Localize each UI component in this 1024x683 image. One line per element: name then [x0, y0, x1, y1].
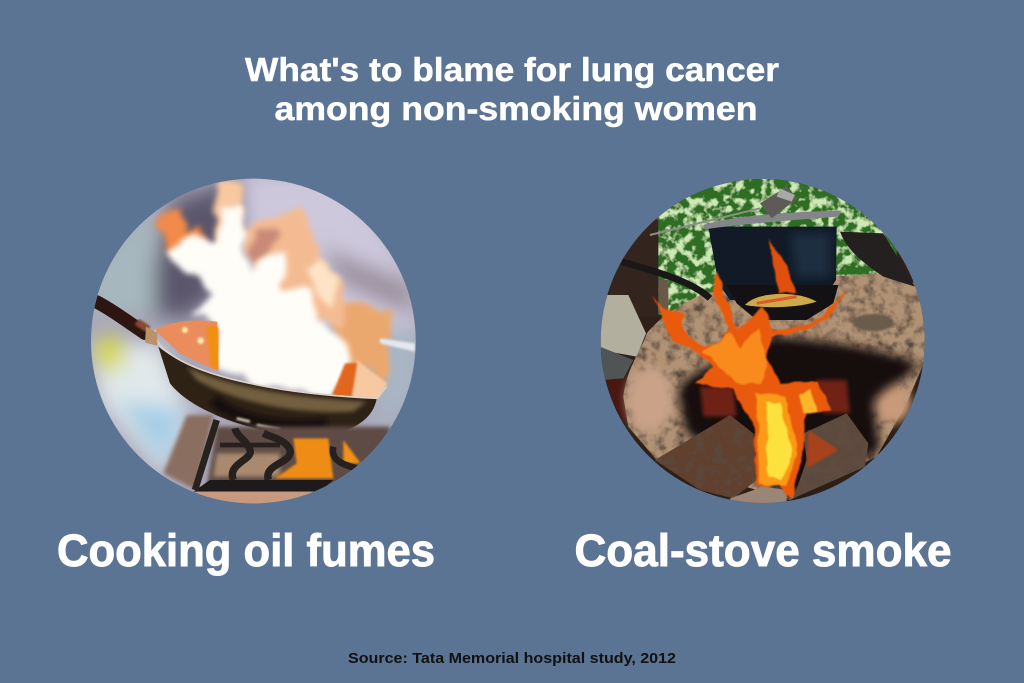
title — [245, 51, 779, 127]
clay stove body — [623, 273, 927, 500]
wok at right — [840, 232, 915, 287]
title: among non-smoking women — [274, 90, 758, 127]
flames — [653, 238, 845, 498]
left post and jar — [600, 220, 668, 423]
pan handle — [96, 302, 145, 333]
photo: wood-fired clay stove — [600, 179, 925, 503]
pan — [155, 320, 387, 437]
source: Source: Tata Memorial hospital study, 2012 — [348, 650, 676, 667]
burner — [163, 415, 390, 505]
label: coal-stove smoke: Coal-stove smoke — [574, 525, 952, 576]
photo: flaming pan on gas burner — [80, 170, 425, 510]
cooking pot — [650, 187, 842, 300]
label: cooking oil fumes: Cooking oil fumes — [57, 525, 435, 576]
flames — [158, 180, 393, 383]
stove opening — [678, 337, 918, 497]
title: What's to blame for lung cancer — [245, 51, 779, 88]
frying pan and food — [622, 262, 838, 320]
foliage — [657, 175, 897, 315]
right pan handle — [380, 338, 415, 352]
smoke backdrop — [87, 173, 420, 477]
logs — [655, 413, 868, 507]
